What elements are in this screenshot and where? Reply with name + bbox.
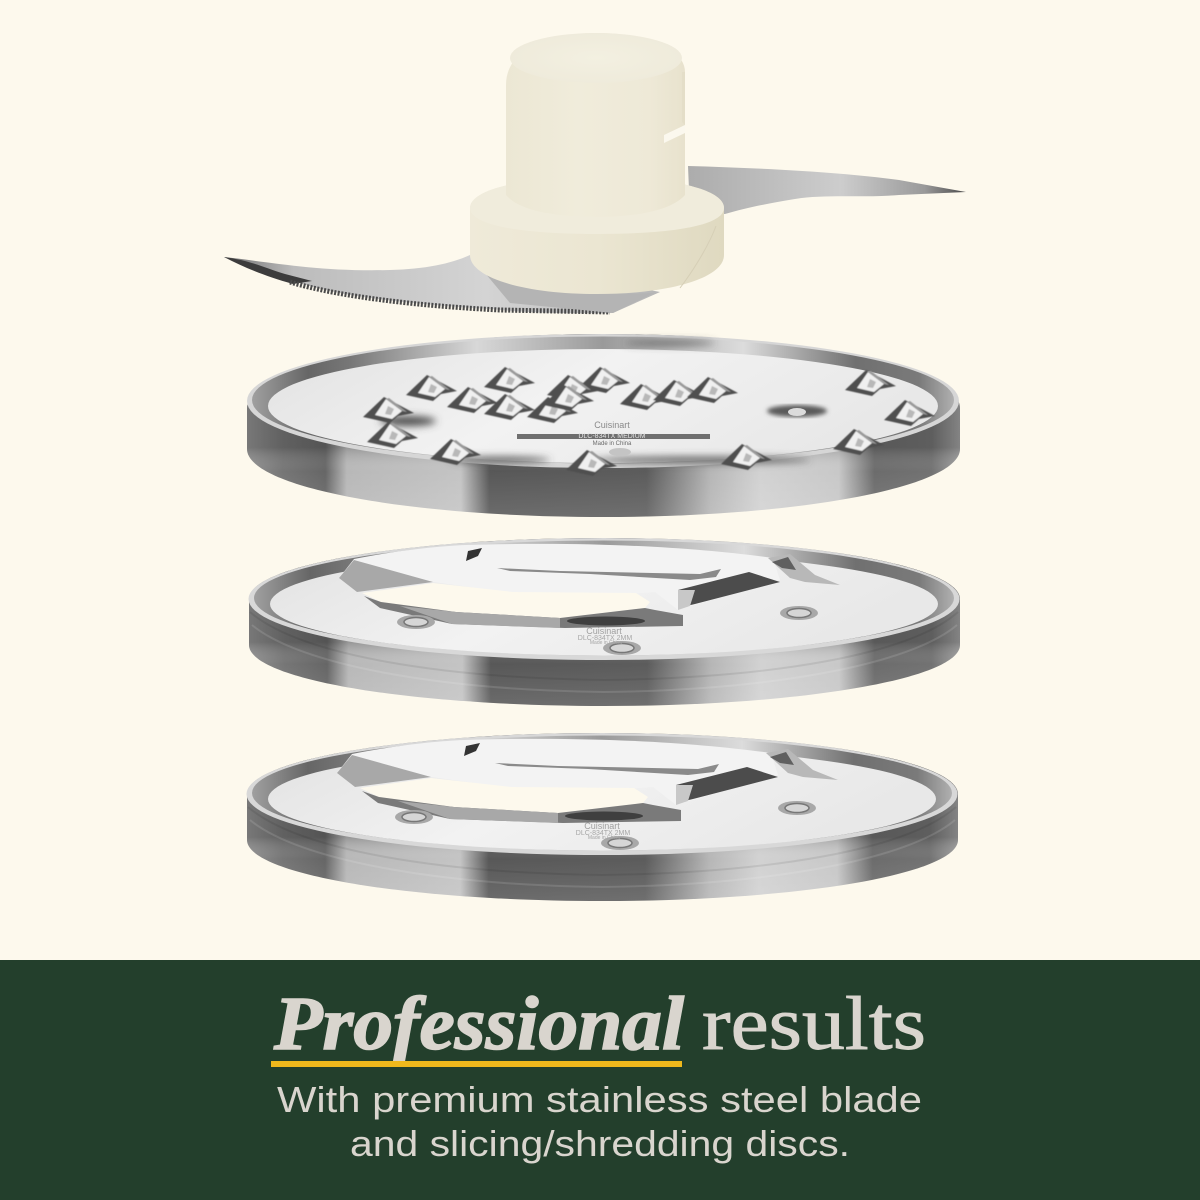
rivet hole — [767, 405, 827, 417]
left serrated blade wing — [224, 255, 660, 313]
disc markings: Cuisinart — [594, 420, 630, 430]
subtext: With premium stainless steel blade — [277, 1079, 922, 1120]
disc markings — [517, 420, 710, 447]
disc markings: Made in China — [593, 441, 632, 447]
plate shadows — [380, 341, 810, 463]
heading: Professional — [273, 982, 684, 1066]
chopping blade with cream hub — [224, 33, 966, 313]
grater teeth — [363, 367, 935, 476]
shredding disc — [247, 334, 960, 517]
subtext — [277, 1079, 922, 1164]
hub collar — [470, 177, 724, 294]
disc markings: DLC-834TX MEDIUM — [578, 433, 646, 440]
hub cylinder — [506, 33, 685, 217]
yellow underline — [271, 1061, 682, 1067]
subtext: and slicing/shredding discs. — [350, 1123, 850, 1164]
slicing disc one — [248, 538, 960, 706]
right blade wing — [688, 166, 966, 214]
slicing disc two — [246, 733, 958, 901]
caption band — [0, 960, 1200, 1200]
heading: results — [702, 982, 926, 1066]
heading — [273, 982, 926, 1066]
